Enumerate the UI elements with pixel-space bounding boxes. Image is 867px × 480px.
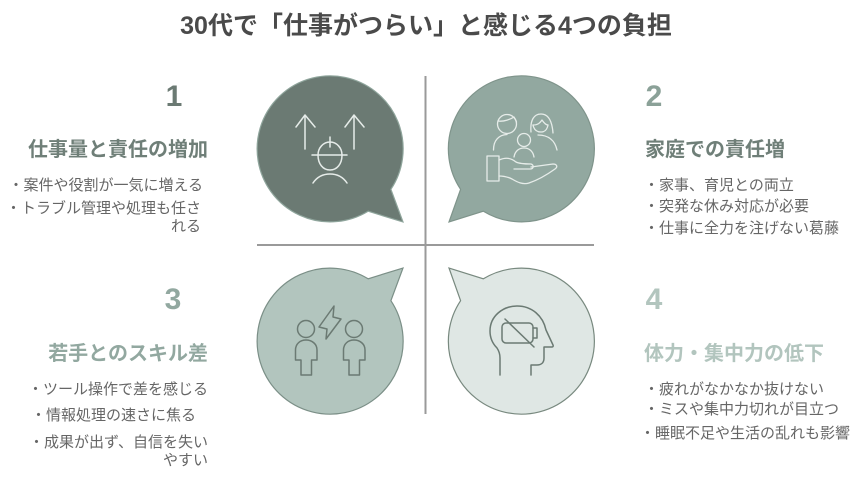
panel: bubble 3	[257, 268, 403, 414]
list 4: ・疲れがなかなか抜けない	[644, 381, 824, 398]
panel: 4 stamina text	[640, 283, 850, 442]
list 2	[644, 177, 839, 237]
speech bubble 1	[257, 76, 403, 222]
list 2: ・仕事に全力を注げない葛藤	[644, 220, 839, 237]
speech bubble 4	[448, 268, 594, 414]
panel: bubble 2	[448, 76, 594, 222]
panel: 1 workload text	[6, 80, 208, 235]
number 2: 2	[646, 80, 662, 113]
list 1: ・トラブル管理や処理も任さ	[6, 199, 201, 217]
heading 2: 家庭での責任増	[645, 138, 785, 161]
list 3: やすい	[163, 452, 208, 469]
title: 30代で「仕事がつらい」と感じる4つの負担	[180, 11, 672, 40]
list 3	[28, 381, 208, 469]
list 1	[6, 177, 203, 235]
list 2: ・家事、育児との両立	[644, 177, 794, 194]
list 1: れる	[171, 218, 201, 235]
icon: head with empty battery	[490, 306, 553, 375]
icon: worker with rising arrows	[296, 115, 364, 183]
number 3: 3	[165, 283, 181, 316]
list 3: ・成果が出ず、自信を失い	[29, 434, 208, 451]
panel: 3 skill gap text	[28, 283, 208, 469]
panel: bubble 1	[257, 76, 403, 222]
speech bubble 3	[257, 268, 403, 414]
heading 1: 仕事量と責任の増加	[28, 138, 208, 161]
number 4: 4	[646, 283, 663, 316]
icon: family on a hand	[487, 114, 557, 184]
panel: 2 family text	[644, 80, 839, 237]
list 4: ・睡眠不足や生活の乱れも影響	[640, 425, 850, 442]
number 1: 1	[166, 80, 182, 113]
list 3: ・ツール操作で差を感じる	[28, 381, 208, 398]
list 4: ・ミスや集中力切れが目立つ	[644, 401, 839, 418]
heading 3: 若手とのスキル差	[48, 342, 208, 365]
list 2: ・突発な休み対応が必要	[644, 198, 809, 215]
list 3: ・情報処理の速さに焦る	[31, 407, 196, 424]
panel: bubble 4	[448, 268, 594, 414]
list 1: ・案件や役割が一気に増える	[8, 177, 203, 194]
list 4	[640, 381, 850, 442]
heading 4: 体力・集中力の低下	[644, 342, 824, 365]
speech bubble 2	[448, 76, 594, 222]
icon: two people with lightning	[296, 306, 365, 375]
